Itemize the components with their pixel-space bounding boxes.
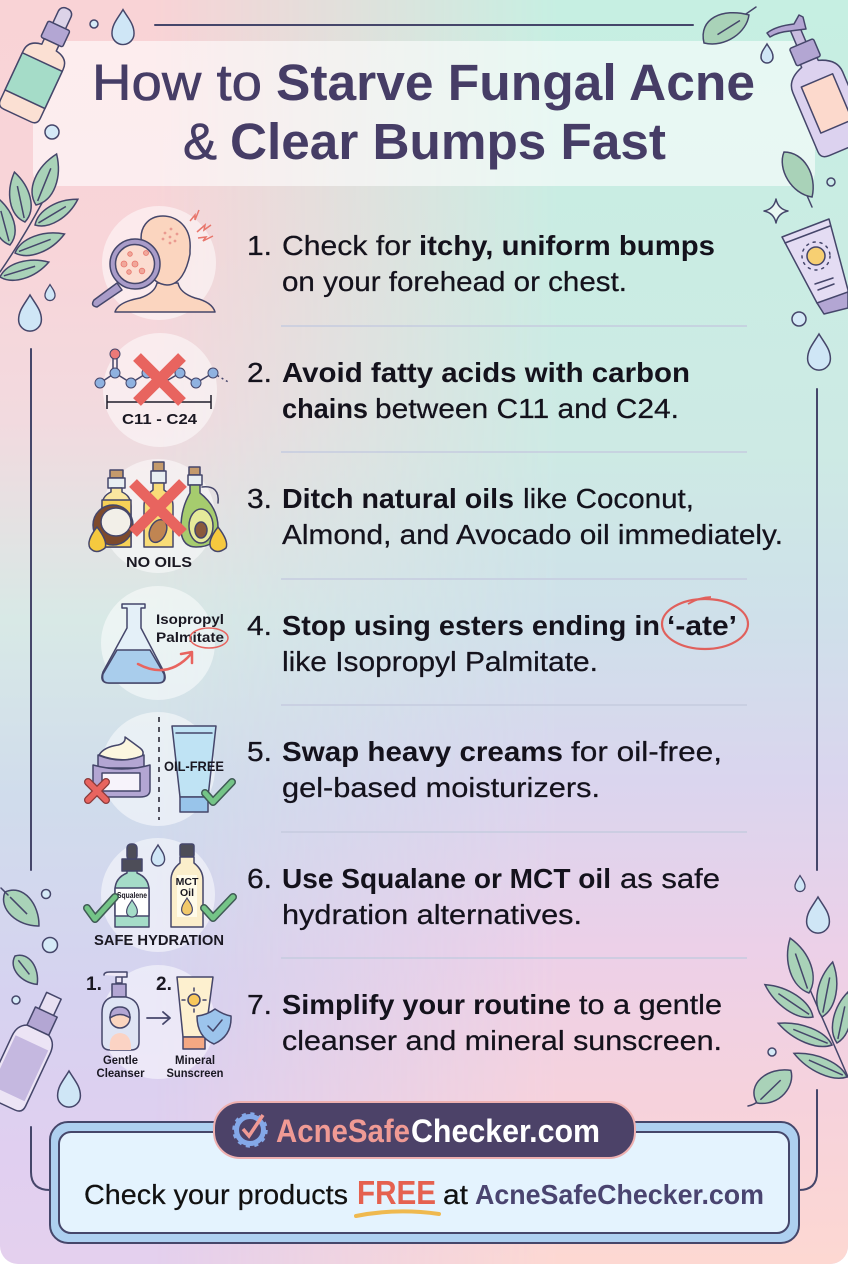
step 6 icon: squalane and MCT oil: MCT	[176, 876, 199, 888]
call to action panel: Check your products	[84, 1179, 348, 1210]
step 7 icon: two-step routine: 1.	[86, 974, 102, 995]
title: How to	[92, 54, 262, 111]
decoration: bottom-right leaf branch	[760, 935, 848, 1084]
step 3 icon: natural oils crossed: NO OILS	[126, 554, 192, 571]
step 2 icon: carbon chain crossed: C11 - C24	[122, 411, 198, 428]
step 6 icon: squalane and MCT oil: Oil	[180, 887, 194, 899]
step 6 text	[247, 863, 720, 930]
step 7 icon: two-step routine: 2.	[156, 974, 172, 995]
step 4 icon: flask and ester label: Isopropyl	[156, 612, 224, 627]
step 2 text: between C11 and C24.	[375, 393, 679, 424]
step 7 text: to a gentle	[579, 989, 722, 1020]
decoration: right leaf and sparkle	[764, 145, 835, 223]
decoration: bottom-left spray bottle	[0, 987, 73, 1113]
title	[92, 54, 755, 170]
brand pill	[214, 1102, 635, 1158]
step 4 text: ‘-ate’	[667, 610, 737, 641]
step 1 text: itchy, uniform bumps	[419, 230, 715, 261]
step 3 icon: natural oils crossed	[89, 459, 227, 573]
step 7 icon: two-step routine: Mineral	[175, 1055, 215, 1067]
step 1 text: Check for	[282, 230, 411, 261]
decoration: right bubble and droplet	[792, 312, 830, 370]
decoration: right sunscreen tube	[782, 219, 848, 314]
step 4 text: Stop using esters ending in	[282, 610, 660, 641]
step 6 text: 6.	[247, 863, 272, 894]
step 6 icon: squalane and MCT oil: Squalene	[117, 891, 147, 900]
step 7 text	[247, 989, 722, 1056]
step 3 text: 3.	[247, 483, 272, 514]
step 5 text: gel-based moisturizers.	[282, 772, 600, 803]
step 2 text: chains	[282, 393, 368, 424]
step 7 icon: two-step routine	[86, 965, 231, 1080]
step 6 icon: squalane and MCT oil	[87, 838, 233, 952]
step 3 text: like Coconut,	[523, 483, 694, 514]
step 7 text: 7.	[247, 989, 272, 1020]
step 1 icon: inspecting bumps	[93, 206, 216, 320]
step 3 text	[247, 483, 783, 550]
step 4 text: 4.	[247, 610, 272, 641]
title: Starve Fungal Acne	[276, 54, 755, 111]
step 7 icon: two-step routine: Gentle	[103, 1055, 138, 1067]
title: &	[183, 113, 217, 170]
dividers	[281, 326, 747, 958]
title: Clear Bumps Fast	[230, 113, 666, 170]
step 1 text: on your forehead or chest.	[282, 266, 627, 297]
step 2 text: 2.	[247, 357, 272, 388]
step 1 text: 1.	[247, 230, 272, 261]
decoration: bottom-right leaf and bubble	[747, 1048, 799, 1112]
step 5 text: for oil-free,	[571, 736, 722, 767]
step 6 text: Use Squalane or MCT oil	[282, 863, 611, 894]
decoration: bottom-left droplet	[58, 1071, 80, 1107]
decoration: bottom-right droplets	[795, 876, 829, 933]
decoration: top-right pump bottle	[761, 15, 848, 159]
call to action panel: FREE	[357, 1174, 436, 1211]
call to action panel: AcneSafeChecker.com	[475, 1179, 764, 1210]
decoration: top-right leaf	[695, 1, 756, 52]
step 5 icon: cream versus gel: OIL-FREE	[164, 758, 224, 774]
step 6 icon: squalane and MCT oil: SAFE HYDRATION	[94, 932, 224, 949]
call to action panel: at	[443, 1179, 468, 1210]
step 2 text: Avoid fatty acids with carbon	[282, 357, 690, 388]
step 7 text: cleanser and mineral sunscreen.	[282, 1025, 722, 1056]
step 5 icon: cream versus gel	[88, 712, 232, 826]
title panel	[33, 41, 815, 186]
step 4 icon: flask and ester label: Palmitate	[156, 630, 225, 645]
step 1 text	[247, 230, 715, 297]
step 2 text	[247, 357, 690, 424]
step 4 icon: flask and ester label	[101, 586, 228, 700]
decoration: bottom-left leaves and bubbles	[0, 883, 57, 1004]
step 7 text: Simplify your routine	[282, 989, 571, 1020]
decoration: top-left leaf branch	[0, 150, 82, 285]
step 3 text: Ditch natural oils	[282, 483, 514, 514]
step 3 text: Almond, and Avocado oil immediately.	[282, 519, 783, 550]
step 2 icon: carbon chain crossed	[95, 333, 230, 447]
brand pill: Checker.com	[411, 1113, 600, 1149]
brand pill: AcneSafe	[276, 1113, 410, 1149]
step 4 text: like Isopropyl Palmitate.	[282, 646, 598, 677]
step 5 text	[247, 736, 722, 803]
step 5 text: Swap heavy creams	[282, 736, 563, 767]
decoration: top-left droplets and bubbles	[19, 10, 134, 331]
call to action panel	[50, 1122, 799, 1243]
decoration: top-left dropper bottle	[0, 0, 87, 125]
step 4 text	[247, 597, 748, 677]
step 5 text: 5.	[247, 736, 272, 767]
step 6 text: as safe	[620, 863, 720, 894]
step 7 icon: two-step routine: Sunscreen	[166, 1068, 224, 1080]
step 6 text: hydration alternatives.	[282, 899, 582, 930]
step 7 icon: two-step routine: Cleanser	[96, 1068, 145, 1080]
